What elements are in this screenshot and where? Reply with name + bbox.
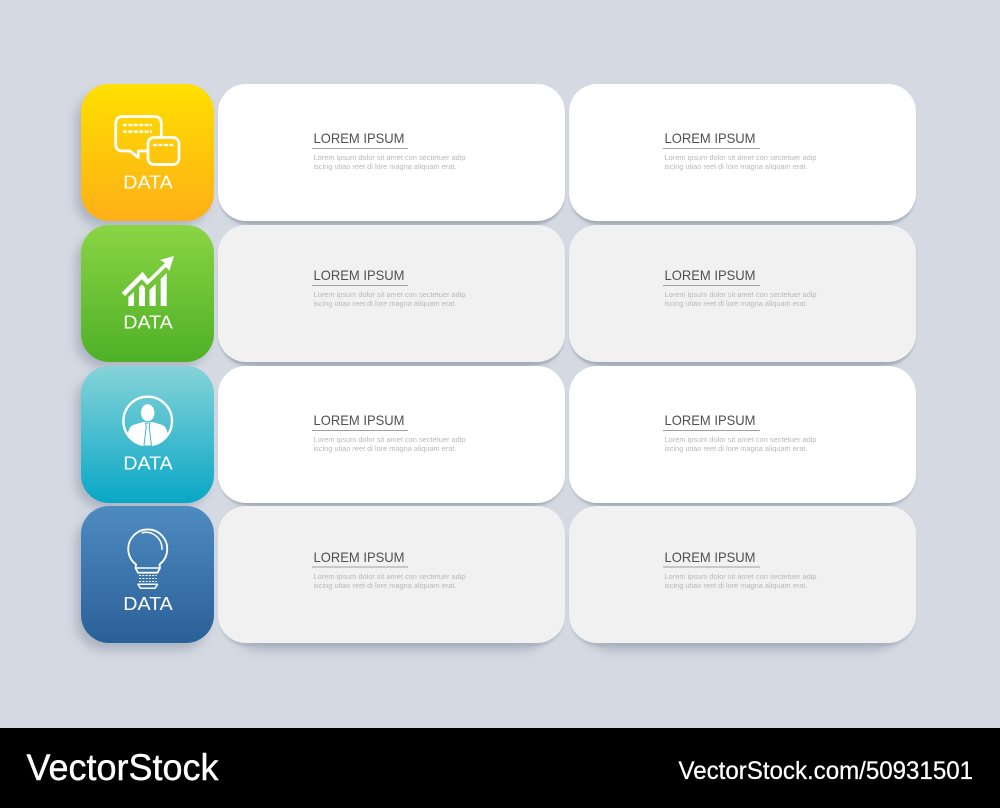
panel: row 1 right: LOREM IPSUM	[664, 130, 756, 146]
panel: row 3 left: Lorem ipsum dolor sit amet con sectetuer adip	[314, 437, 466, 444]
panel: row 1 right	[569, 84, 916, 221]
logo text: VectorStock	[26, 747, 219, 788]
tile: blue bulb	[81, 506, 214, 643]
tile: teal person: DATA	[123, 454, 173, 474]
icon: speech bubbles	[116, 116, 179, 164]
row 3	[81, 366, 916, 503]
panel: row 3 left: LOREM IPSUM	[314, 412, 404, 428]
panel: row 4 left	[218, 506, 565, 643]
panel: row 2 right: Lorem ipsum dolor sit amet con sectetuer adip	[664, 292, 817, 299]
panel: row 3 right: Lorem ipsum dolor sit amet con sectetuer adip	[664, 437, 817, 444]
row 4	[81, 506, 916, 643]
row 2	[81, 225, 916, 362]
panel: row 4 right	[569, 506, 916, 643]
panel: row 1 left: LOREM IPSUM	[314, 130, 404, 146]
panel: row 2 left: LOREM IPSUM	[314, 267, 404, 283]
panel: row 1 left	[218, 84, 565, 221]
icon: growth chart	[122, 256, 174, 306]
panel: row 4 right: LOREM IPSUM	[664, 549, 756, 565]
tile: teal person	[81, 366, 214, 503]
tile: yellow chat	[81, 84, 214, 221]
icon: light bulb	[128, 529, 167, 588]
tile: blue bulb: DATA	[123, 594, 173, 614]
image url text: VectorStock.com/50931501	[678, 757, 973, 785]
panel: row 3 left	[218, 366, 565, 503]
panel: row 2 right	[569, 225, 916, 362]
icon: businessman	[123, 397, 172, 450]
row 1	[81, 84, 916, 221]
panel shadows	[76, 87, 915, 650]
footer bar	[0, 728, 1000, 808]
panel: row 1 right: iscing utiao reet di lore magna aliquam erat.	[664, 164, 808, 171]
panel: row 2 left: iscing utiao reet di lore magna aliquam erat.	[314, 301, 457, 308]
tile: green chart: DATA	[123, 313, 173, 333]
panel: row 4 right: iscing utiao reet di lore magna aliquam erat.	[664, 583, 808, 590]
tile: green chart	[81, 225, 214, 362]
panel: row 4 left: iscing utiao reet di lore magna aliquam erat.	[314, 583, 457, 590]
panel: row 2 left	[218, 225, 565, 362]
panel: row 3 left: iscing utiao reet di lore magna aliquam erat.	[314, 446, 457, 453]
tile: yellow chat: DATA	[123, 172, 173, 192]
panel: row 2 right: LOREM IPSUM	[664, 267, 756, 283]
panel: row 1 right: Lorem ipsum dolor sit amet con sectetuer adip	[664, 155, 817, 162]
panel: row 4 right: Lorem ipsum dolor sit amet con sectetuer adip	[664, 574, 817, 581]
panel: row 1 left: iscing utiao reet di lore magna aliquam erat.	[314, 164, 457, 171]
panel: row 4 left: LOREM IPSUM	[314, 549, 404, 565]
panel: row 1 left: Lorem ipsum dolor sit amet con sectetuer adip	[314, 155, 466, 162]
panel: row 2 left: Lorem ipsum dolor sit amet con sectetuer adip	[314, 292, 466, 299]
panel: row 3 right: iscing utiao reet di lore magna aliquam erat.	[664, 446, 808, 453]
panel: row 3 right	[569, 366, 916, 503]
panel: row 2 right: iscing utiao reet di lore magna aliquam erat.	[664, 301, 808, 308]
panel: row 3 right: LOREM IPSUM	[664, 412, 756, 428]
panel: row 4 left: Lorem ipsum dolor sit amet con sectetuer adip	[314, 574, 466, 581]
